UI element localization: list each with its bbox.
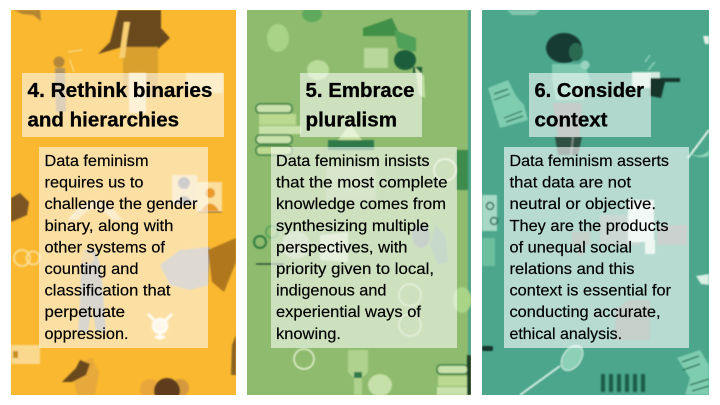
panel 4 body text: other systems of [44,239,166,256]
panel 6 background [482,10,709,395]
panel 6 body box [504,147,689,348]
panel 4 body text: perpetuate [44,304,125,321]
panel 4 heading: and hierarchies [28,110,179,132]
panel 4 body text: classification that [44,283,171,300]
panel 4 background [11,10,236,395]
panel 4 body text: binary, along with [44,218,174,235]
panel 4 body text: requires us to [44,175,144,192]
panel 5 body text: knowing. [276,326,341,343]
panel 4 body box [39,147,208,348]
panel 5 body text: Data feminism insists [276,153,430,170]
panel 6 heading: 6. Consider [534,80,644,102]
panel: 6. Consider context [482,10,709,395]
panel 6 body text: ethical analysis. [510,326,622,343]
panel 4 heading: 4. Rethink binaries [28,80,212,102]
panel 5 background [247,10,471,395]
panel 5 body text: indigenous and [276,283,386,300]
panel 4 title box [22,73,224,137]
panel 6 body text: They are the products [510,218,669,235]
panel 4 heading [28,80,212,132]
panel 4 body text: Data feminism [44,153,148,170]
panel 6 illustrations [482,10,709,395]
panel 6 body text: neutral or objective. [510,196,656,213]
panel 6 heading [534,80,644,132]
panel 6 body text: that data are not [510,175,632,192]
panel 4 body text: challenge the gender [44,196,198,213]
panel: 5. Embrace pluralism [247,6,471,396]
panel 5 title box [300,73,422,137]
panel 5 body text: perspectives, with [276,239,408,256]
panel 6 title box [529,73,651,137]
panel 5 body text: priority given to local, [276,261,434,278]
panel 5 body box [271,147,457,348]
panel 5 body text: synthesizing multiple [276,218,429,235]
panel: 4. Rethink binaries and hierarchies [11,10,236,404]
panel 4 body text [44,153,198,343]
panel 6 heading: context [534,110,608,132]
panel 5 body text [276,153,448,343]
panel 6 body text: Data feminism asserts [510,153,669,170]
panel 5 heading: 5. Embrace [306,80,414,102]
panel 4 body text: counting and [44,261,138,278]
panel 6 body text: relations and this [510,261,635,278]
panel 5 body text: experiential ways of [276,304,422,321]
panel 5 heading [306,80,414,132]
panel 6 body text: conducting accurate, [510,304,660,321]
panel 6 body text [510,153,671,343]
panel 6 body text: of unequal social [510,239,632,256]
panel 5 illustrations [254,6,471,396]
panel 5 heading: pluralism [306,110,397,132]
panel 4 body text: oppression. [44,326,128,343]
panel 5 body text: knowledge comes from [276,196,446,213]
panel 4 illustrations [11,10,236,404]
panel 6 body text: context is essential for [510,283,671,300]
panel 5 body text: that the most complete [276,175,448,192]
